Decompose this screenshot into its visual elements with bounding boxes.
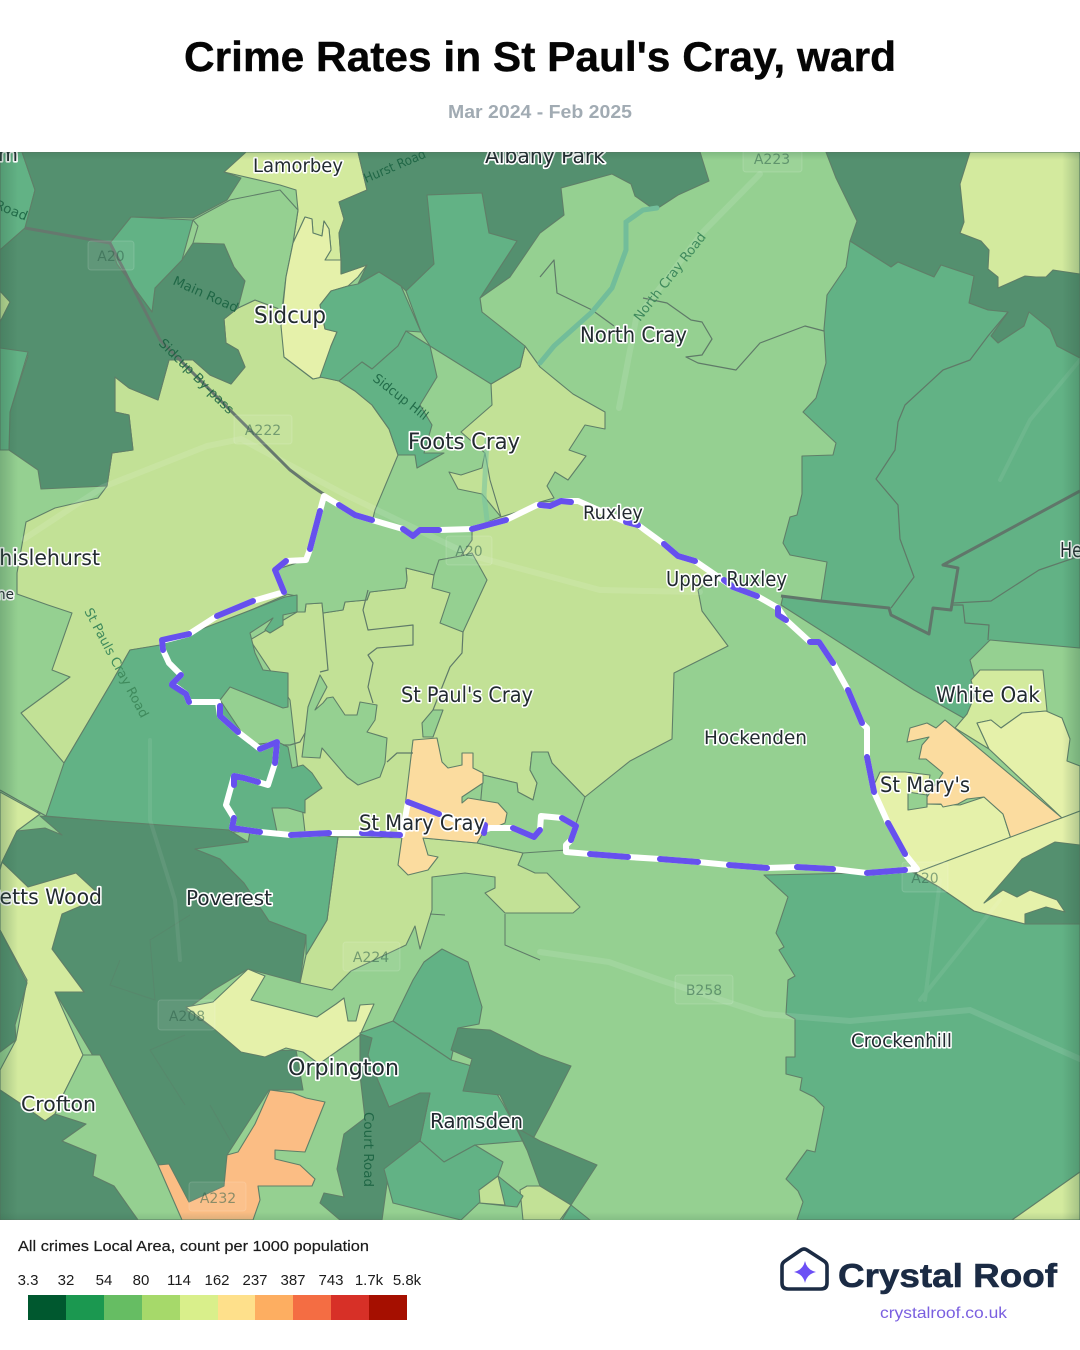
- road badges: [88, 150, 948, 1211]
- road labels: Main Road: [170, 274, 240, 316]
- road badges: A20: [911, 871, 939, 887]
- road labels: Sidcup Hill: [370, 371, 431, 424]
- place labels: White Oak: [936, 683, 1041, 707]
- legend scale labels: 3.3: [18, 1272, 38, 1289]
- road badges: A223: [754, 152, 790, 168]
- title: Crime Rates in St Paul's Cray, ward: [184, 33, 896, 80]
- place labels: North Cray: [580, 323, 687, 347]
- legend scale labels: 32: [58, 1272, 74, 1289]
- place labels: Sidcup: [254, 303, 326, 329]
- road labels: Sidcup By-pass: [155, 336, 237, 418]
- road badges: A222: [245, 423, 281, 439]
- road labels: Court Road: [360, 1112, 375, 1187]
- legend scale labels: 5.8k: [393, 1272, 422, 1289]
- place labels: Hockenden: [704, 727, 807, 749]
- road badges: A20: [455, 544, 483, 560]
- place labels: Poverest: [186, 886, 272, 910]
- place labels: St Paul's Cray: [401, 683, 533, 707]
- legend scale labels: 743: [318, 1272, 344, 1289]
- ward boundary: St Paul's Cray: [162, 496, 917, 873]
- place labels: Crockenhill: [851, 1030, 952, 1052]
- place labels: Upper Ruxley: [666, 567, 787, 591]
- map panel: [0, 152, 1080, 1220]
- road badges: A20: [97, 249, 125, 265]
- road badges: B258: [686, 983, 722, 999]
- bypass road line: [25, 228, 325, 495]
- legend scale labels: 54: [96, 1272, 112, 1289]
- choropleth base: [0, 152, 1080, 1220]
- place labels: Orpington: [288, 1056, 399, 1081]
- place labels: Foots Cray: [408, 430, 520, 455]
- choropleth areas: [0, 152, 1080, 1220]
- subtitle: date range: Mar 2024 - Feb 2025: [448, 102, 632, 122]
- legend title: All crimes Local Area, count per 1000 population: [18, 1238, 369, 1255]
- road labels: [0, 147, 710, 1187]
- boundary lines: [0, 260, 1080, 1140]
- roads and river: [24, 174, 1080, 1059]
- legend scale labels: 237: [242, 1272, 268, 1289]
- legend scale labels: 114: [167, 1272, 191, 1289]
- place labels: [0, 142, 1080, 1133]
- legend scale labels: 80: [133, 1272, 149, 1289]
- place labels: St Mary Cray: [359, 811, 485, 835]
- legend scale labels: 1.7k: [355, 1272, 384, 1289]
- website: crystalroof.co.uk: [880, 1305, 1008, 1322]
- legend scale labels: 387: [280, 1272, 306, 1289]
- legend scale labels: [18, 1272, 422, 1289]
- place labels: Lamorbey: [253, 155, 343, 177]
- place labels: Ramsden: [430, 1109, 523, 1133]
- road badges: A232: [200, 1191, 236, 1207]
- road labels: North Cray Road: [631, 230, 710, 324]
- legend colour ramp: [28, 1295, 407, 1320]
- wordmark: Crystal Roof: [838, 1257, 1058, 1294]
- legend: [18, 1238, 422, 1320]
- road badges: A224: [353, 950, 389, 966]
- road badges: A208: [169, 1009, 205, 1025]
- logo: Crystal Roof: [780, 1247, 1058, 1322]
- legend scale labels: 162: [204, 1272, 230, 1289]
- place labels: Crofton: [21, 1092, 96, 1116]
- place labels: St Mary's: [880, 773, 970, 797]
- road labels: St Pauls Cray Road: [80, 606, 151, 721]
- icon: house with star: [782, 1249, 827, 1289]
- place labels: Ruxley: [583, 502, 643, 524]
